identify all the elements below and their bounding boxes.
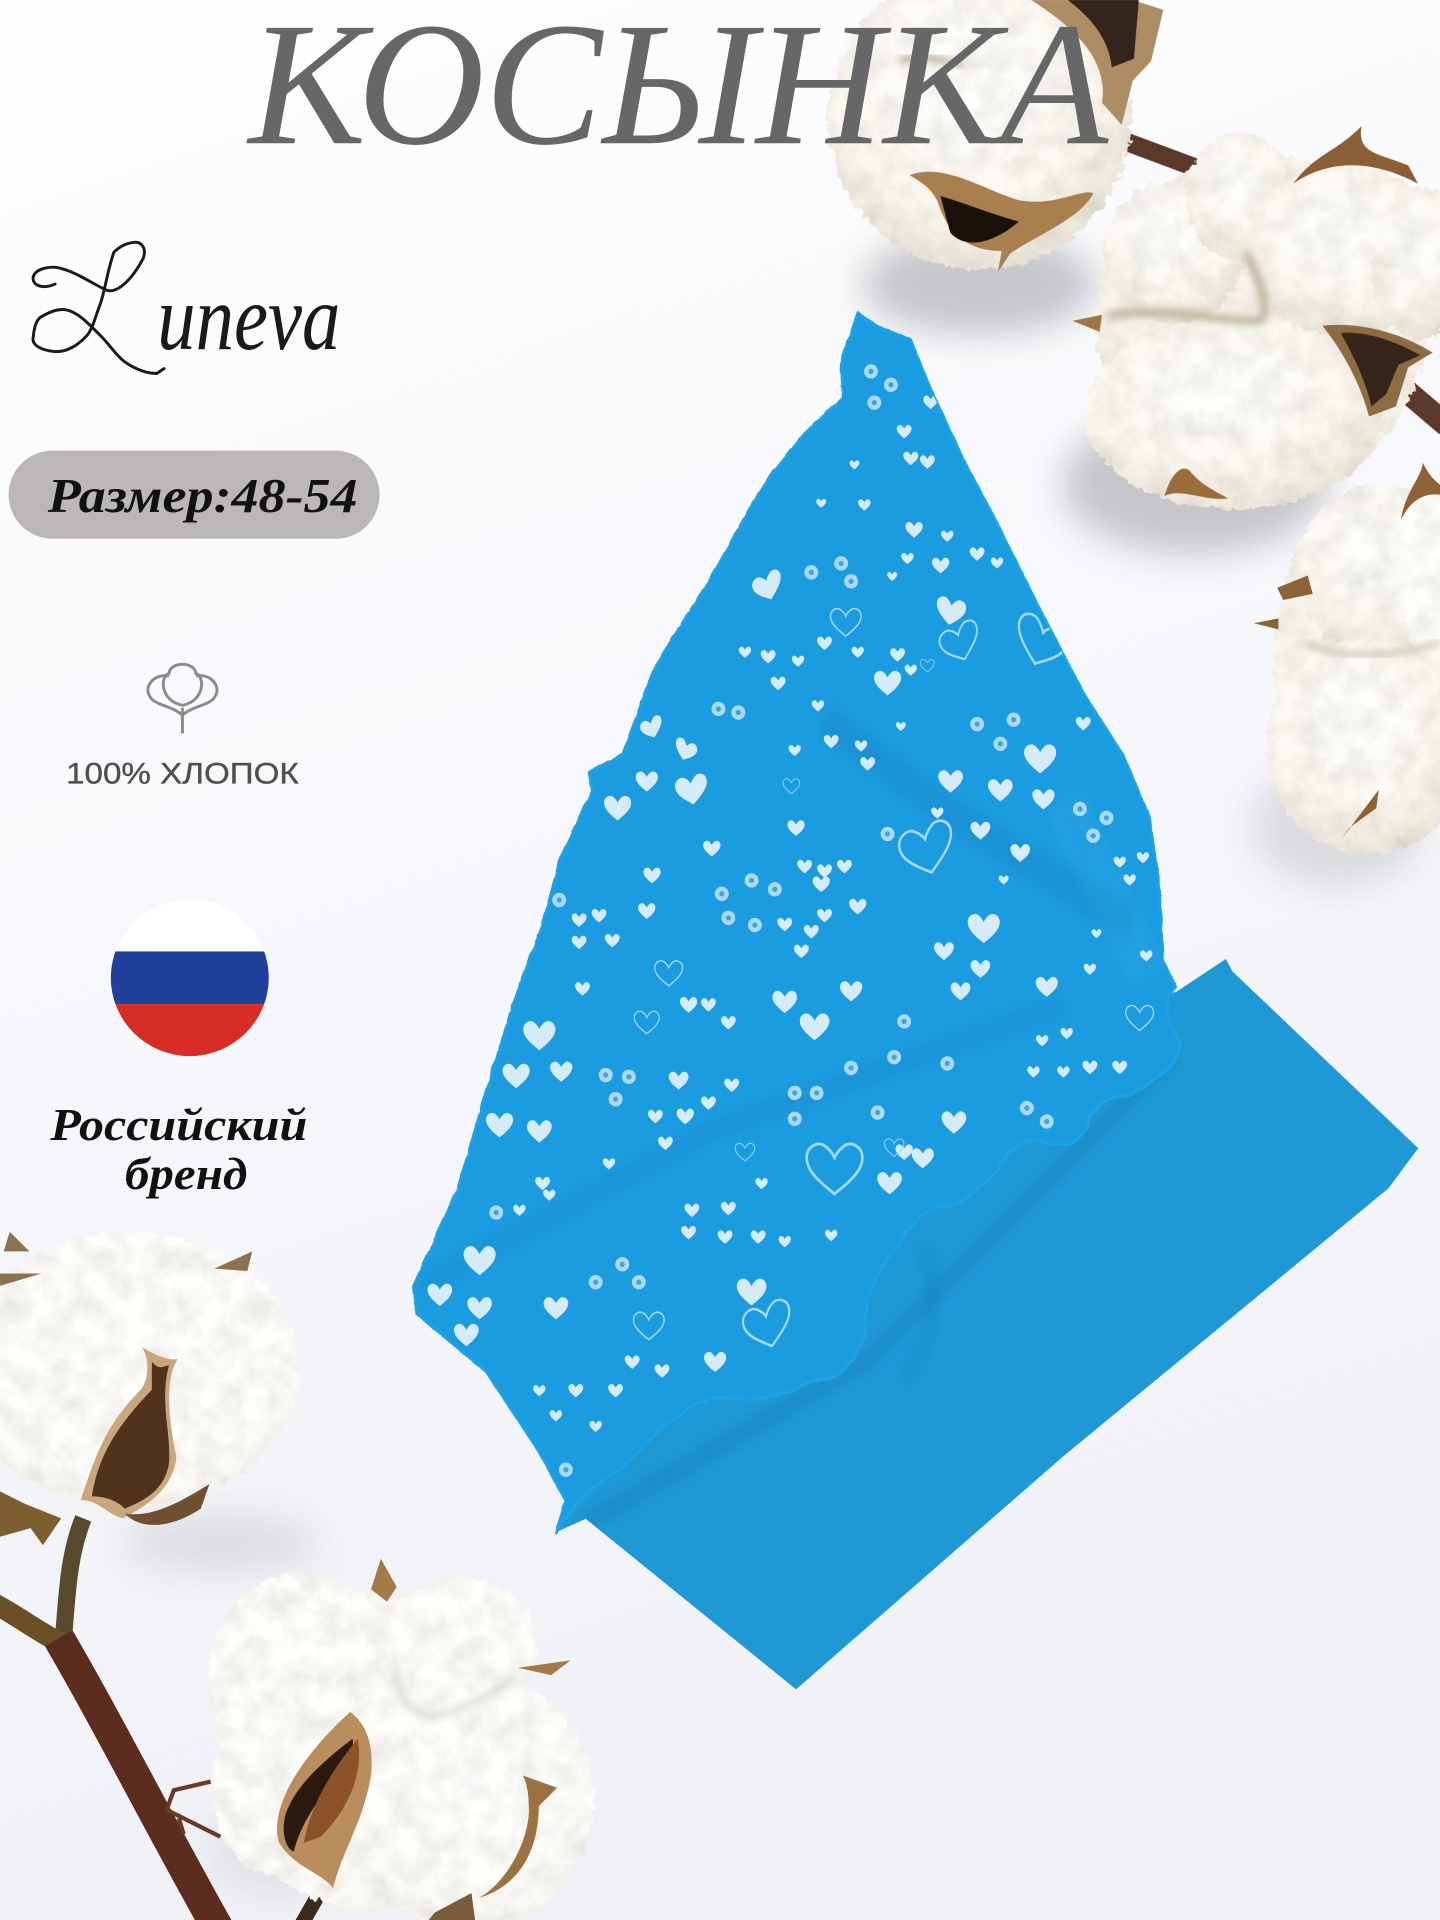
brand logo <box>33 242 340 373</box>
bract: centre <box>81 1347 178 1518</box>
branch: lower left <box>0 1518 321 1920</box>
bract: dark right <box>1322 325 1433 416</box>
icon: russian flag <box>110 899 269 1057</box>
plain blue band <box>556 959 1418 1689</box>
cotton boll: upper right <box>1073 126 1440 509</box>
bract: lower <box>910 172 1093 272</box>
cotton boll: bottom centre <box>167 1559 594 1920</box>
bract: left <box>0 1491 61 1545</box>
cotton boll: top centre <box>828 0 1163 272</box>
bract: right <box>479 1776 557 1898</box>
bract: centre <box>277 1712 372 1888</box>
size badge <box>9 451 380 539</box>
bract: top <box>1293 126 1418 184</box>
branch: upper right stems <box>1120 140 1440 424</box>
brand origin label: Российский <box>49 1100 307 1150</box>
cotton boll: lower right <box>1254 463 1440 855</box>
bract: lower <box>125 1484 209 1525</box>
soft shadows under cotton <box>122 233 1423 1896</box>
bract: tips <box>0 1232 252 1286</box>
twigs <box>167 1782 220 1837</box>
bract: upper right <box>1031 0 1163 125</box>
brand origin label: бренд <box>125 1149 247 1199</box>
printed panel <box>413 313 1180 1532</box>
cotton label: 100% ХЛОПОК <box>66 758 299 791</box>
cotton boll: lower left <box>0 1232 300 1545</box>
product: blue kerchief <box>413 313 1418 1689</box>
badge text: Размер:48-54 <box>47 468 358 523</box>
icon: cotton flower <box>148 664 217 733</box>
bract: dark interior <box>940 196 1019 243</box>
brand origin label <box>49 1100 307 1199</box>
badge pill <box>9 451 380 539</box>
bract: left tip <box>1073 315 1102 332</box>
bract: tips <box>1254 463 1440 840</box>
heart print <box>428 364 1154 1477</box>
bract: lower tip <box>1164 469 1228 499</box>
bract: tips <box>371 1559 571 1675</box>
